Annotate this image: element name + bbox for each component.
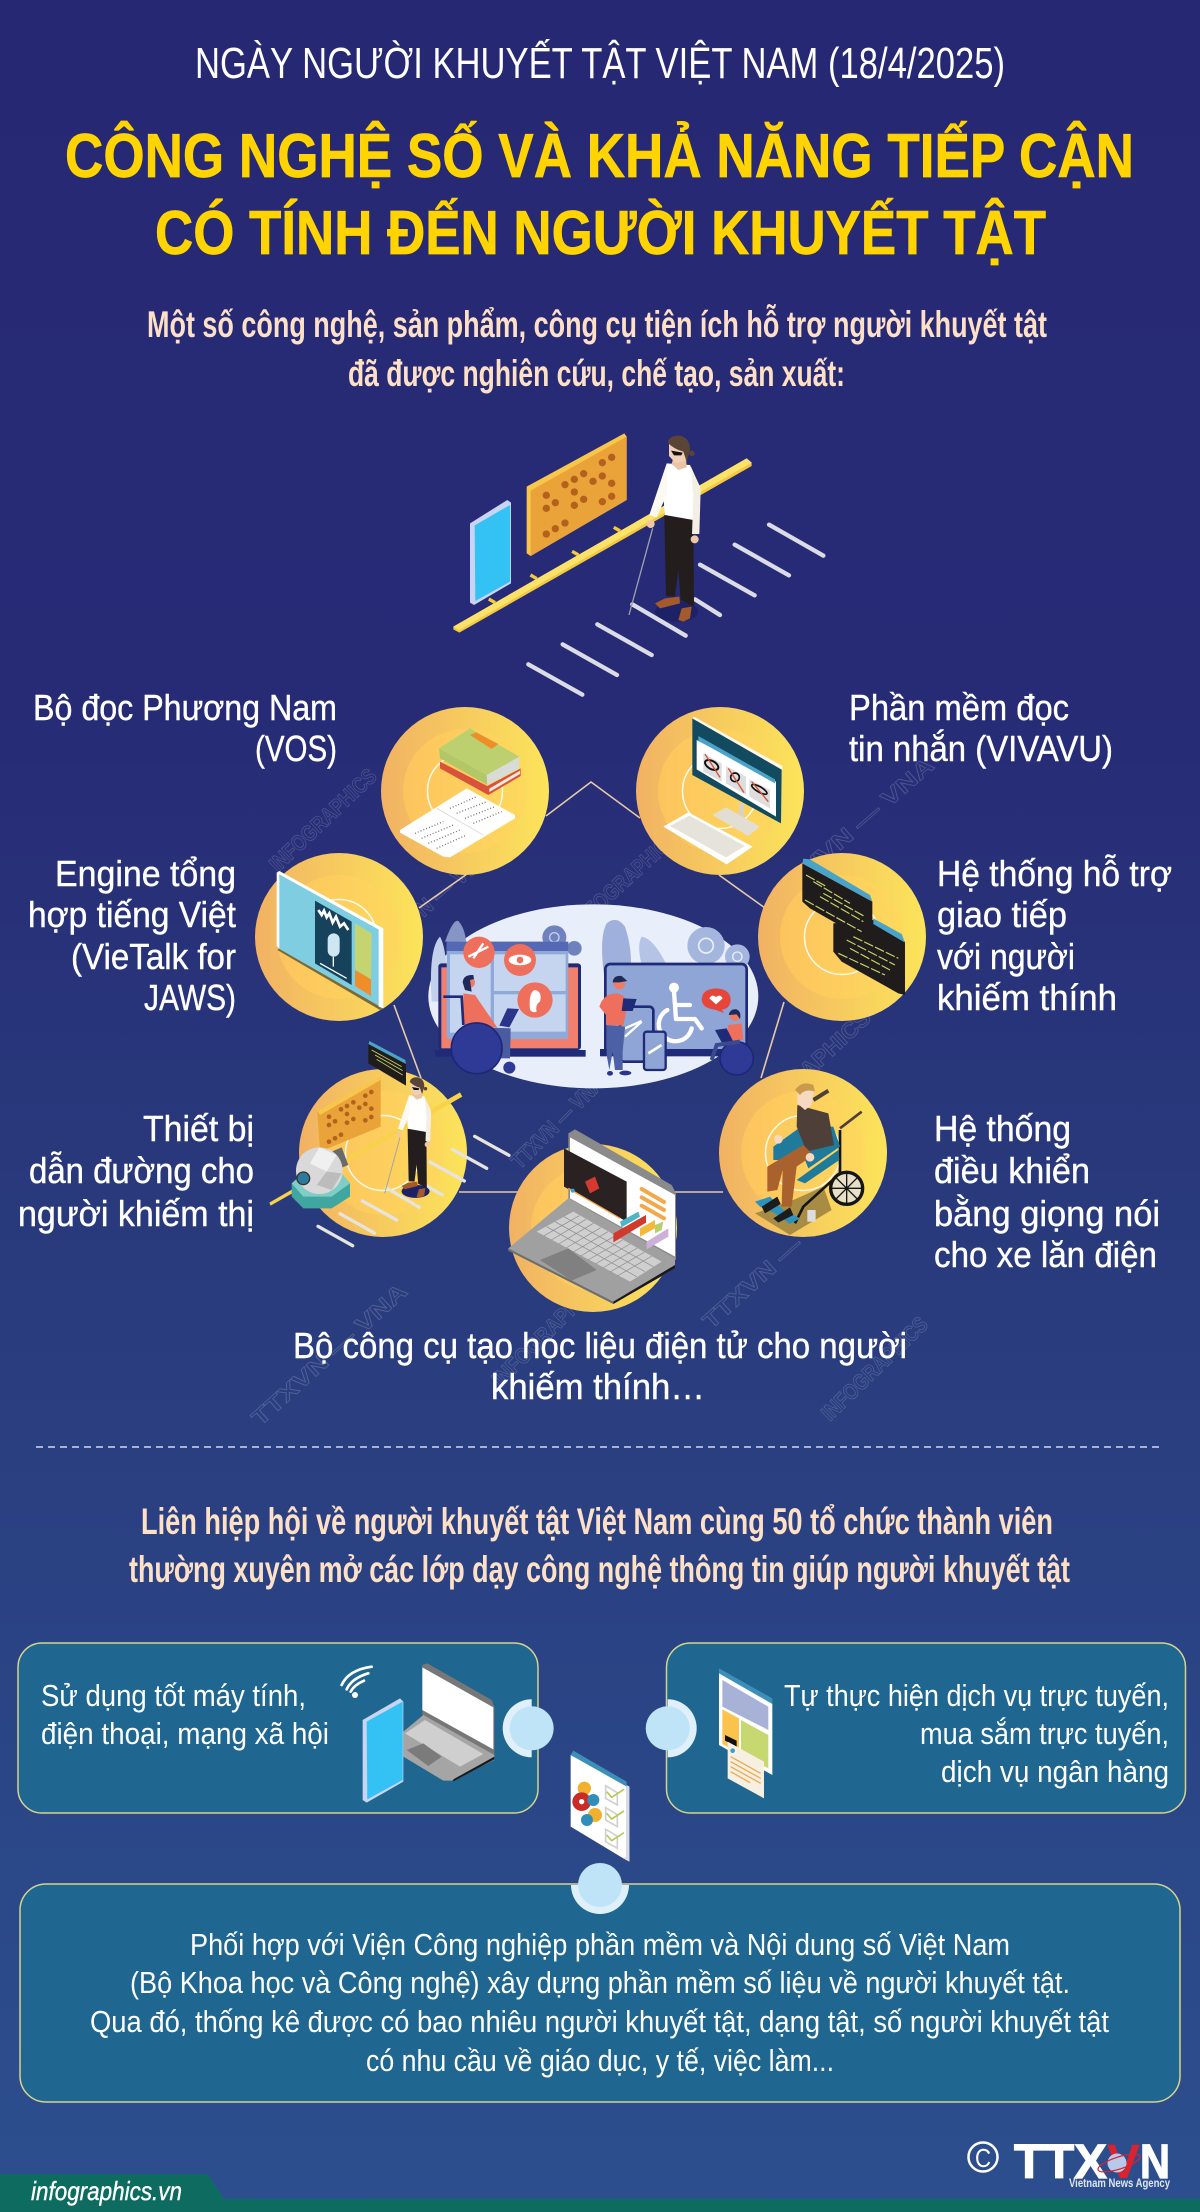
title: CÓ TÍNH ĐẾN NGƯỜI KHUYẾT TẬT [155, 199, 1046, 268]
watermarks: TTXVN — VNA [247, 1278, 412, 1431]
label: Hệ thống điều khiển xe lăn: Hệ thống [934, 1108, 1071, 1149]
text: online services [784, 1678, 1169, 1789]
watermarks: INFOGRAPHICS [728, 1005, 876, 1145]
label: Engine tổng hợp tiếng Việt [28, 853, 236, 1018]
label: Hệ thống hỗ trợ giao tiếp [937, 853, 1172, 1018]
text: statistics software: (Bộ Khoa học và Công nghệ) xây dựng phần mềm số liệu về người khuyết tật. [130, 1965, 1070, 2000]
icon: tablet, laptop and wifi [342, 1663, 494, 1803]
text: infographics.vn: infographics.vn [31, 2176, 182, 2206]
logo: TTXVN: V [1107, 2136, 1140, 2189]
watermarks [247, 752, 939, 1431]
watermarks: INFOGRAPHICS [487, 1271, 608, 1392]
icon: laptop with e-learning content [508, 1129, 677, 1312]
connector dot: right [646, 1699, 697, 1757]
watermarks: TTXVN — VNA [770, 752, 939, 904]
label: Thiết bị dẫn đường: dẫn đường cho [29, 1150, 254, 1191]
label: Thiết bị dẫn đường [18, 1108, 254, 1234]
label: Engine tổng hợp tiếng Việt: (VieTalk for [71, 936, 236, 977]
text: statistics software: có nhu cầu về giáo dục, y tế, việc làm... [366, 2043, 834, 2078]
watermarks: TTXVN — VNA [370, 842, 497, 957]
icon: text to speech panel [255, 853, 423, 1021]
header: event line: NGÀY NGƯỜI KHUYẾT TẬT VIỆT NAM (18/4/2025) [195, 38, 1005, 88]
label: Bộ đọc Phương Nam [33, 687, 337, 769]
icon: guiding device for the blind [269, 1041, 509, 1246]
watermarks: INFOGRAPHICS [816, 1312, 933, 1426]
panel: online services [666, 1643, 1186, 1813]
label: Hệ thống điều khiển xe lăn: bằng giọng nói [934, 1193, 1160, 1234]
watermarks: TTXVN — VNA [698, 1188, 856, 1334]
label: Bộ công cụ tạo học liệu [293, 1325, 907, 1407]
label: Bộ công cụ tạo học liệu: khiếm thính… [491, 1366, 705, 1407]
label: Engine tổng hợp tiếng Việt: JAWS) [144, 977, 236, 1018]
watermarks: INFOGRAPHICS [264, 763, 382, 877]
label: Phần mềm đọc tin nhắn: tin nhắn (VIVAVU) [849, 728, 1113, 769]
icon: checklist with gears [571, 1751, 629, 1862]
label: Bộ đọc Phương Nam: Bộ đọc Phương Nam [33, 687, 337, 728]
panel: computer skills [18, 1643, 538, 1813]
label: Hệ thống hỗ trợ giao tiếp: khiếm thính [937, 977, 1117, 1018]
text: computer skills [41, 1678, 329, 1751]
icon: computer with image captions [636, 707, 804, 875]
label: Phần mềm đọc tin nhắn: Phần mềm đọc [849, 687, 1069, 728]
connector dot: bottom [571, 1863, 629, 1914]
connector dot: left [503, 1699, 554, 1757]
label: Hệ thống hỗ trợ giao tiếp: Hệ thống hỗ trợ [937, 853, 1172, 894]
watermarks: TTXVN — VNA [506, 1071, 608, 1174]
label: Hệ thống hỗ trợ giao tiếp: với người [937, 936, 1075, 977]
label: Phần mềm đọc tin nhắn [849, 687, 1113, 769]
label: Engine tổng hợp tiếng Việt: hợp tiếng Việt [28, 894, 236, 935]
text: computer skills: điện thoại, mạng xã hội [41, 1716, 329, 1751]
text: online services: mua sắm trực tuyến, [920, 1716, 1169, 1751]
label: Thiết bị dẫn đường: người khiếm thị [18, 1193, 254, 1234]
label: Bộ đọc Phương Nam: (VOS) [255, 728, 337, 769]
label: Thiết bị dẫn đường: Thiết bị [143, 1108, 254, 1149]
text: computer skills: Sử dụng tốt máy tính, [41, 1678, 306, 1713]
title [65, 122, 1134, 268]
logo: TTXVN: Vietnam News Agency [1069, 2176, 1170, 2190]
label: Hệ thống hỗ trợ giao tiếp: giao tiếp [937, 894, 1067, 935]
section heading: Liên hiệp hội [129, 1501, 1070, 1590]
logo: TTXVN: TTX [1014, 2136, 1107, 2189]
label: Hệ thống điều khiển xe lăn: điều khiển [934, 1150, 1090, 1191]
label: Bộ công cụ tạo học liệu: Bộ công cụ tạo học liệu điện tử cho người [293, 1325, 907, 1366]
panel: statistics software [20, 1884, 1180, 2102]
icon: man in voice controlled wheelchair [719, 1069, 887, 1237]
text: online services: dịch vụ ngân hàng [941, 1754, 1169, 1789]
subtitle: đã được nghiên cứu, chế tạo, sản xuất: [348, 353, 845, 394]
watermarks: INFOGRAPHICS [567, 825, 683, 934]
icon: web page and document [719, 1668, 772, 1798]
icon: braille books [381, 707, 549, 875]
text: statistics software [90, 1927, 1109, 2078]
connector lines [394, 782, 784, 1192]
illustration: blind person with guide rail, tablet and braille board [453, 433, 823, 695]
label: Hệ thống điều khiển xe lăn: cho xe lăn điện [934, 1234, 1157, 1275]
logo: TTXVN [968, 2136, 1170, 2190]
label: Hệ thống điều khiển xe lăn [934, 1108, 1160, 1275]
panel: central illustration [428, 904, 758, 1088]
label: Engine tổng hợp tiếng Việt: Engine tổng [55, 853, 236, 894]
text: statistics software: Phối hợp với Viện Công nghiệp phần mềm và Nội dung số Việt Nam [190, 1927, 1010, 1962]
logo: TTXVN: C [975, 2143, 991, 2173]
footer: bottom bar and site tab [0, 2174, 1200, 2212]
logo: TTXVN: N [1140, 2136, 1170, 2189]
subtitle [147, 304, 1047, 394]
icon: chat windows [758, 853, 926, 1021]
